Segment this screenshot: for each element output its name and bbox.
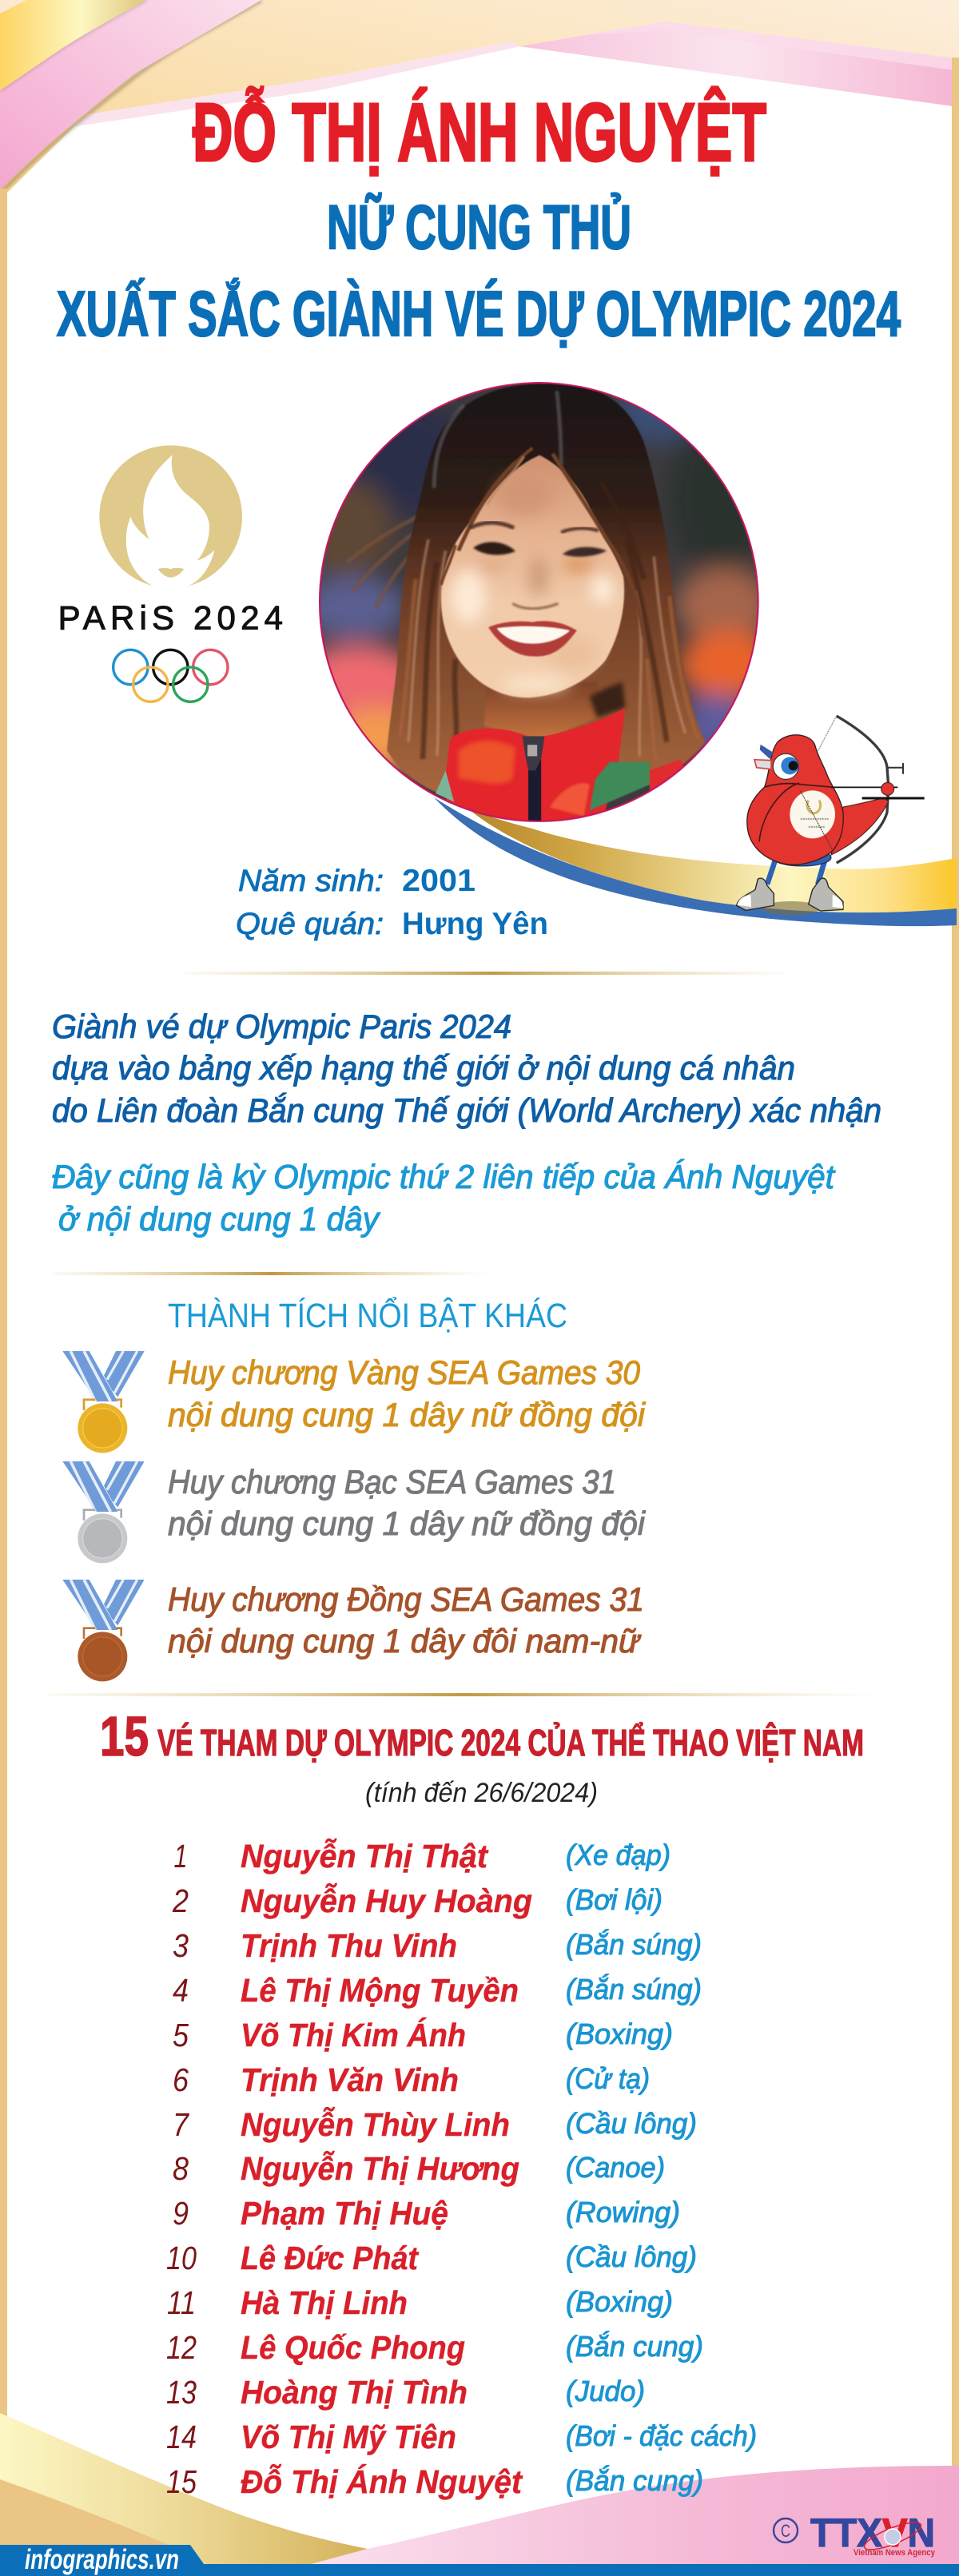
row 12 (166, 2329, 703, 2366)
paragraph: second Olympics (52, 1158, 836, 1238)
row 5: (Boxing) (566, 2017, 673, 2050)
row 5 (173, 2017, 673, 2053)
hand (881, 782, 894, 795)
row 9: 9 (173, 2195, 189, 2232)
row 11: (Boxing) (566, 2285, 673, 2318)
paragraph: second Olympics: Đây cũng là kỳ Olympic thứ 2 liên tiếp của Ánh Nguyệt (52, 1158, 836, 1195)
row 8: Nguyễn Thị Hương (241, 2150, 519, 2187)
row 9 (173, 2195, 680, 2232)
mascot: Phryge archer (737, 716, 925, 915)
bow (837, 716, 889, 863)
row 2: (Bơi lội) (566, 1883, 663, 1916)
row 11 (167, 2284, 673, 2321)
row 13: (Judo) (566, 2375, 645, 2407)
row 12: 12 (166, 2329, 197, 2366)
copyright mark (774, 2518, 798, 2542)
row 6 (173, 2061, 650, 2098)
zipper (528, 759, 541, 825)
mouth (488, 621, 577, 657)
achievement: bronze medal text: nội dung cung 1 dây đôi nam-nữ (168, 1622, 642, 1660)
arm (831, 797, 889, 855)
achievement: gold medal text: Huy chương Vàng SEA Games 30 (168, 1354, 641, 1391)
swoosh under the portrait (434, 797, 957, 926)
row 9: Phạm Thị Huệ (241, 2195, 448, 2232)
row 14: Võ Thị Mỹ Tiên (241, 2419, 456, 2455)
logo: Paris 2024 (58, 445, 283, 702)
row 7 (173, 2106, 697, 2143)
row 13 (166, 2374, 645, 2411)
row 3: 3 (173, 1927, 189, 1964)
row 15 (166, 2463, 703, 2500)
row 8: 8 (173, 2150, 189, 2187)
nose (512, 603, 559, 609)
paragraph: second Olympics: ở nội dung cung 1 dây (58, 1200, 381, 1238)
eye (773, 753, 798, 779)
bangs (441, 448, 644, 636)
row 6: (Cử tạ) (566, 2062, 650, 2095)
heading: other achievements: THÀNH TÍCH NỔI BẬT KHÁC (168, 1295, 567, 1335)
icon: olympic rings (113, 650, 228, 702)
icon: flame emblem (99, 445, 242, 591)
arrow (831, 785, 897, 789)
icon: gold medal (62, 1351, 145, 1453)
brows (470, 523, 514, 528)
row 1: 1 (174, 1838, 187, 1874)
hometown label: Quê quán: (236, 908, 384, 941)
row 9: (Rowing) (566, 2196, 680, 2228)
row 4 (173, 1972, 702, 2009)
row 10: Lê Đức Phát (241, 2240, 420, 2276)
birth year value: 2001 (402, 864, 476, 898)
row 1: Nguyễn Thị Thật (241, 1838, 489, 1874)
shorts (773, 849, 831, 866)
hometown value: Hưng Yên (402, 907, 548, 941)
row 7: 7 (173, 2106, 190, 2143)
achievement: silver medal text: Huy chương Bạc SEA Games 31 (168, 1463, 616, 1501)
logo: TTXVN (774, 2510, 936, 2558)
jacket trim (590, 762, 650, 810)
row 13: Hoàng Thị Tình (241, 2374, 468, 2411)
shadow (762, 901, 821, 915)
row 8 (173, 2150, 665, 2187)
chest logo (790, 790, 835, 838)
row 4: (Bắn súng) (566, 1973, 702, 2006)
portrait photo (319, 382, 759, 822)
wordmark: PARiS 2024 (58, 598, 283, 636)
row 2 (172, 1882, 663, 1919)
tagline: Vietnam News Agency (854, 2548, 936, 2558)
row 11: Hà Thị Linh (241, 2284, 408, 2321)
achievement: silver medal text (168, 1463, 647, 1542)
row 12: Lê Quốc Phong (241, 2329, 465, 2366)
birth info (236, 864, 548, 941)
legs (767, 853, 827, 885)
facial highlights and shading (452, 476, 614, 691)
hair (387, 384, 705, 793)
paragraph: qualification: Giành vé dự Olympic Paris 2024 (52, 1008, 511, 1045)
achievement: gold medal text: nội dung cung 1 dây nữ đồng đội (168, 1396, 647, 1433)
hair streaks (400, 483, 698, 762)
row 10: (Cầu lông) (566, 2240, 697, 2273)
copyright mark: C (781, 2521, 790, 2541)
achievement: silver medal text: nội dung cung 1 dây nữ đồng đội (168, 1505, 647, 1542)
row 6: 6 (173, 2061, 189, 2098)
row 15: 15 (166, 2463, 197, 2500)
row 8: (Canoe) (566, 2151, 665, 2184)
arm lines (759, 783, 831, 841)
body (747, 735, 843, 865)
globe (862, 2517, 924, 2555)
row 11: 11 (167, 2284, 196, 2321)
birth year label: Năm sinh: (238, 865, 384, 898)
list: 15 athletes (166, 1838, 757, 2500)
eyes (473, 542, 607, 557)
row 14: 14 (166, 2419, 197, 2455)
row 13: 13 (166, 2374, 197, 2411)
blurred stadium background (320, 396, 758, 783)
shoes (737, 878, 774, 910)
row 14: (Bơi - đặc cách) (566, 2419, 757, 2452)
flyaway hair (347, 514, 424, 608)
footer: site name: infographics.vn (25, 2544, 179, 2575)
row 10 (166, 2240, 697, 2276)
row 7: Nguyễn Thùy Linh (241, 2106, 510, 2143)
subtitle line 1: NỮ CUNG THỦ (327, 192, 631, 262)
title (57, 85, 901, 349)
row 1 (174, 1838, 671, 1874)
heading: 15 tickets (100, 1705, 864, 1767)
wordmark: TTXVN (810, 2510, 935, 2555)
face (441, 455, 624, 698)
row 5: Võ Thị Kim Ánh (241, 2017, 466, 2053)
row 7: (Cầu lông) (566, 2107, 697, 2140)
paragraph: qualification: do Liên đoàn Bắn cung Thế giới (World Archery) xác nhận (52, 1091, 881, 1129)
cockade (760, 745, 773, 759)
part line (531, 384, 551, 419)
background: bottom decoration (0, 2413, 959, 2576)
row 5: 5 (173, 2017, 189, 2053)
jacket (444, 708, 625, 827)
row 1: (Xe đạp) (566, 1839, 671, 1871)
heading: 15 tickets: 15 (100, 1705, 149, 1767)
achievement: bronze medal text: Huy chương Đồng SEA Games 31 (168, 1580, 644, 1618)
row 2: 2 (172, 1882, 189, 1919)
row 2: Nguyễn Huy Hoàng (241, 1882, 532, 1919)
row 3: (Bắn súng) (566, 1928, 702, 1961)
row 15: (Bắn cung) (566, 2464, 703, 2497)
row 15: Đỗ Thị Ánh Nguyệt (241, 2463, 523, 2500)
row 3 (173, 1927, 702, 1964)
paragraph: qualification (52, 1008, 881, 1129)
row 10: 10 (166, 2240, 197, 2276)
date note: (tính đến 26/6/2024) (365, 1778, 598, 1808)
achievement: bronze medal text (168, 1580, 644, 1660)
row 6: Trịnh Văn Vinh (241, 2061, 459, 2098)
row 3: Trịnh Thu Vinh (241, 1927, 457, 1964)
row 12: (Bắn cung) (566, 2330, 703, 2363)
row 4: 4 (173, 1972, 189, 2009)
row 4: Lê Thị Mộng Tuyền (241, 1972, 519, 2009)
neck (484, 682, 601, 740)
icon: silver medal (62, 1461, 145, 1563)
paragraph: qualification: dựa vào bảng xếp hạng thế giới ở nội dung cá nhân (52, 1049, 795, 1087)
row 14 (166, 2419, 757, 2455)
achievement: gold medal text (168, 1354, 647, 1433)
icon: bronze medal (62, 1580, 145, 1681)
background: top decoration (0, 0, 959, 200)
